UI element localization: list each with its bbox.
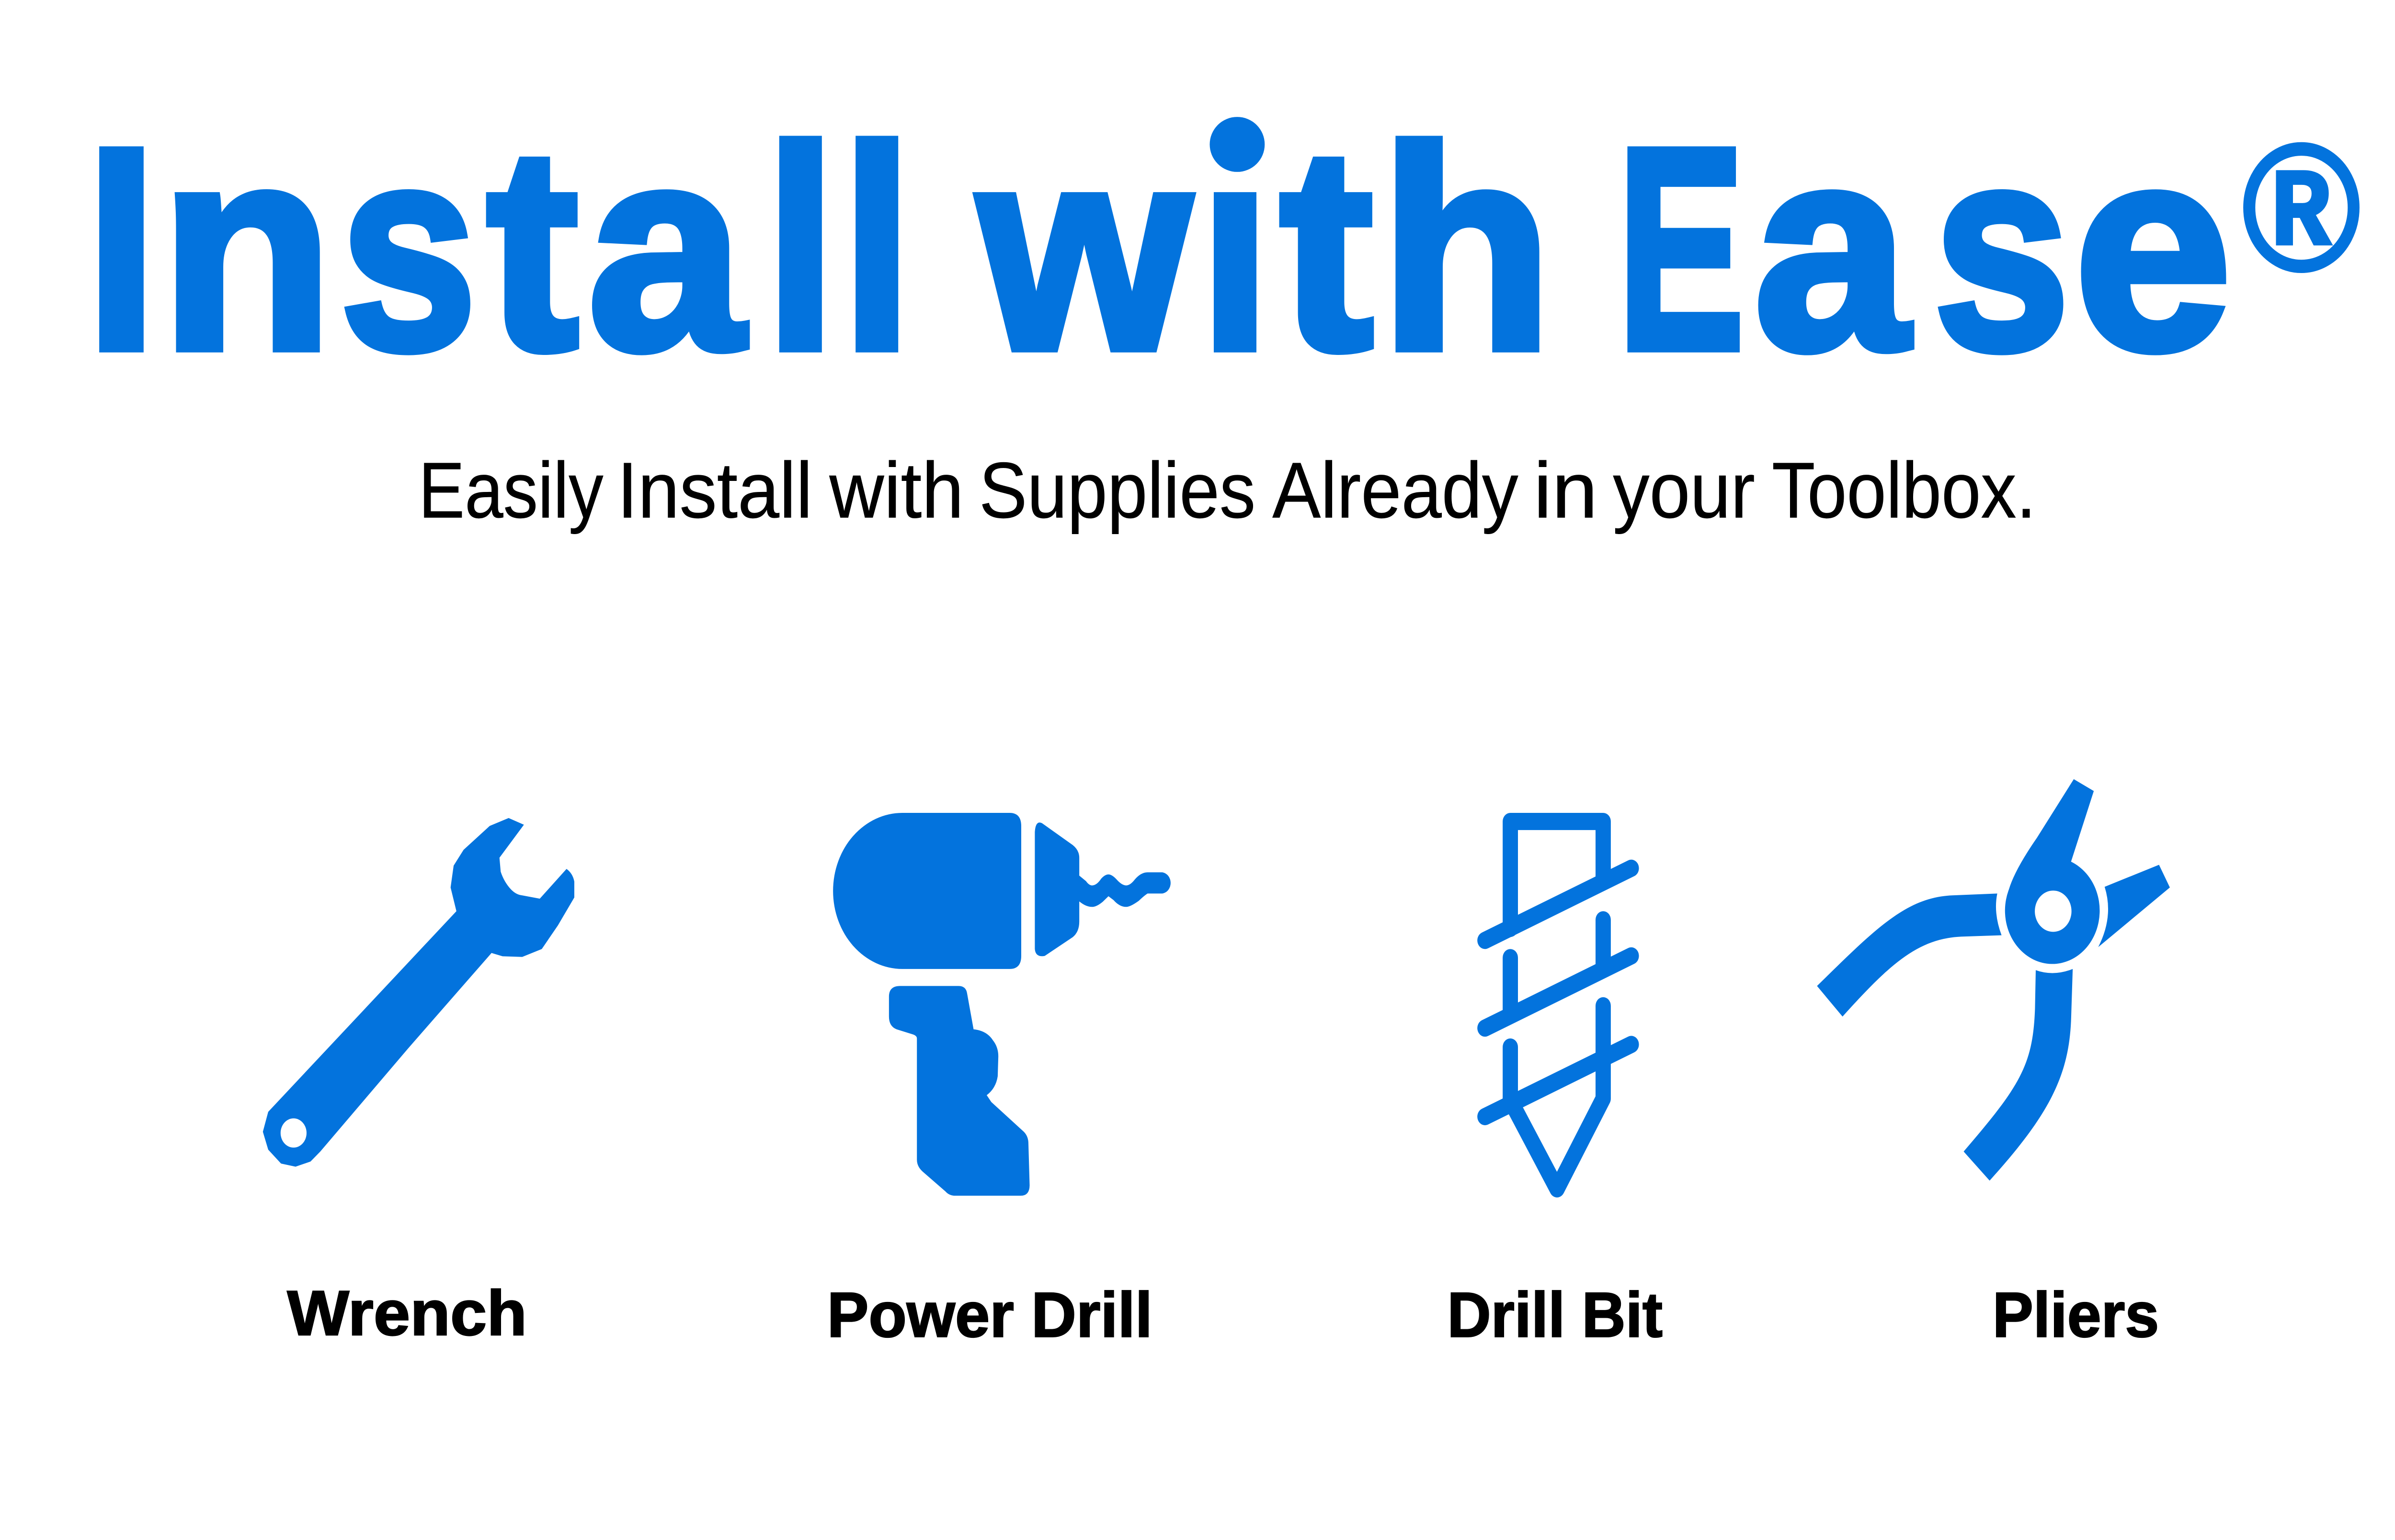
icon: power drill [833, 813, 1171, 1196]
drill chuck and bit [1035, 822, 1171, 956]
subtitle: your [1613, 446, 1755, 535]
subtitle: in [1534, 446, 1597, 535]
subtitle: Toolbox. [1772, 446, 2036, 535]
title: w [974, 89, 1192, 410]
title: E [1618, 89, 1745, 410]
title: ® [2242, 106, 2361, 308]
icon: wrench [263, 818, 574, 1167]
title: I [86, 89, 157, 410]
subtitle: Install [617, 446, 812, 535]
drill body [833, 813, 1021, 969]
subtitle: Supplies [979, 446, 1255, 535]
title: i [1200, 89, 1271, 410]
drill handle [889, 986, 1030, 1196]
subtitle: with [829, 446, 964, 535]
title: a [588, 89, 746, 410]
subtitle [419, 446, 2036, 535]
subtitle: Already [1272, 446, 1518, 535]
pliers left handle [1817, 893, 2002, 1016]
pliers lower handle [1963, 969, 2073, 1181]
title: a [1754, 89, 1910, 410]
label: drill bit: Drill Bit [1447, 1279, 1663, 1350]
shank outline [1510, 821, 1603, 928]
icon: pliers [1817, 779, 2170, 1181]
flute diagonals [1485, 868, 1631, 1117]
title [86, 89, 2361, 410]
pliers lower jaw [2098, 865, 2170, 947]
title: l [765, 89, 836, 410]
title: e [2074, 89, 2232, 410]
label: pliers: Pliers [1993, 1279, 2159, 1350]
title: t [1280, 89, 1373, 410]
label: wrench: Wrench [287, 1277, 527, 1349]
title: t [487, 89, 579, 410]
title: n [160, 89, 333, 410]
flute verticals [1510, 920, 1603, 1189]
title: s [1934, 89, 2070, 410]
icon: drill bit [1485, 821, 1631, 1189]
title: l [842, 89, 912, 410]
pliers pivot and upper jaw [2005, 779, 2099, 964]
subtitle: Easily [419, 446, 604, 535]
title: s [340, 89, 477, 410]
label: power drill: Power Drill [827, 1279, 1152, 1350]
title: h [1380, 89, 1552, 410]
